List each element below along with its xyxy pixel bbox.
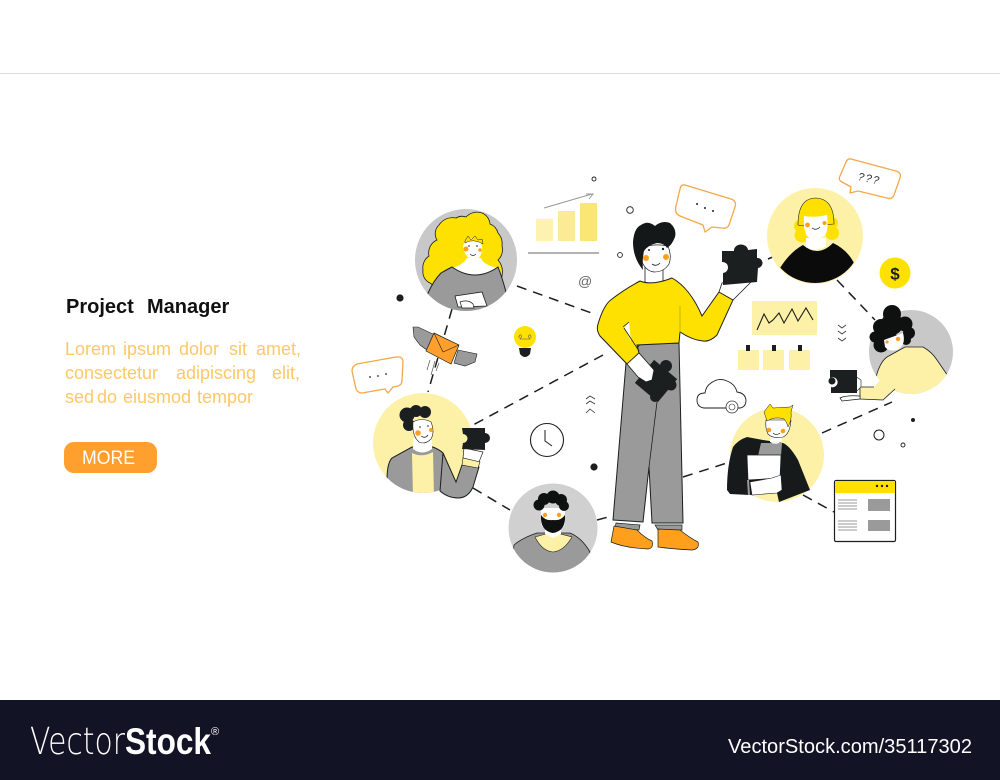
icon: winged envelope [413, 327, 477, 375]
icon: dollar coin: $ [890, 264, 900, 284]
avatar: dark curly-haired woman [828, 305, 953, 410]
description text: ipsum [123, 339, 171, 359]
chevrons down [838, 325, 846, 341]
footer logo [30, 720, 219, 763]
decorative dots and rings [396, 177, 915, 471]
description text: consectetur [65, 363, 158, 383]
dashed connection lines [428, 256, 892, 520]
description text: elit, [272, 363, 300, 383]
footer logo: ® [211, 726, 219, 738]
footer logo: Stock [125, 721, 211, 762]
icon: dollar coin [880, 258, 910, 288]
browser window icon [834, 480, 896, 542]
upper puzzle piece [722, 244, 763, 285]
MORE button [64, 442, 157, 473]
icon: light bulb [514, 326, 536, 357]
title: Project [66, 296, 134, 318]
MORE button: MORE [82, 447, 135, 469]
footer bar [0, 700, 1000, 780]
trousers [613, 343, 683, 523]
hair [633, 222, 675, 270]
face [642, 245, 670, 272]
description text: sit [229, 339, 247, 359]
lower puzzle piece [635, 360, 677, 402]
sweater [597, 278, 733, 364]
neck [645, 262, 663, 286]
cloud sync icon [697, 379, 746, 413]
at sign icon: @ [578, 273, 592, 289]
description text: adipiscing [176, 363, 256, 383]
description text: tempor [197, 387, 253, 407]
line chart panel [752, 301, 817, 335]
speech bubble: left [352, 357, 403, 393]
speech bubble: main figure [676, 185, 736, 232]
footer logo: Vector [30, 720, 126, 763]
shoes [611, 526, 652, 549]
description text [65, 339, 301, 407]
speech bubble: question marks: ??? [857, 171, 882, 188]
speech bubble: question marks [839, 159, 900, 199]
avatar: blond man with tablet [727, 404, 824, 502]
description text: Lorem [65, 339, 116, 359]
description text: amet, [256, 339, 301, 359]
description text: dolor [179, 339, 219, 359]
description text: do [97, 387, 117, 407]
main figure: project manager [597, 222, 763, 550]
bar chart icon [528, 194, 599, 253]
avatar: curly-haired woman [415, 209, 517, 320]
hand on lower puzzle [627, 353, 654, 382]
sticky notes [738, 345, 810, 370]
chevrons up [586, 396, 595, 413]
title: Manager [147, 296, 229, 318]
avatar: man with puzzle piece [373, 393, 490, 500]
avatar: blonde woman [767, 188, 863, 290]
hand holding upper puzzle [719, 281, 752, 300]
footer image id: VectorStock.com/35117302 [728, 736, 972, 758]
clock icon [530, 424, 564, 456]
description text: sed [65, 387, 94, 407]
avatar: bearded man [508, 484, 598, 580]
description text: eiusmod [123, 387, 191, 407]
